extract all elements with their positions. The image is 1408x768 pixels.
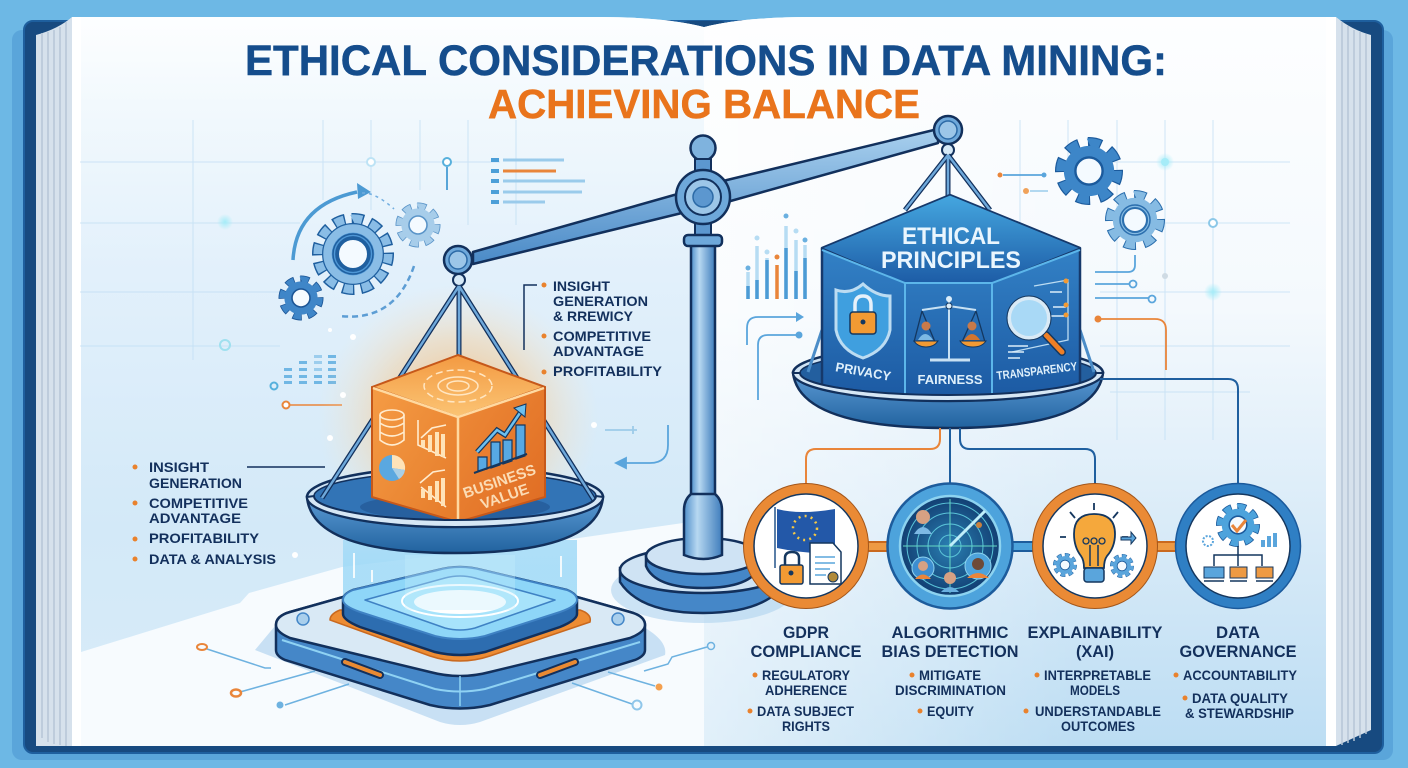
connectors between circles	[865, 541, 1179, 552]
left text list: ADVANTAGE	[149, 510, 241, 526]
text: algorithmic bias detection: MITIGATE	[919, 667, 981, 683]
circle: data governance	[1176, 484, 1300, 608]
middle text list: ADVANTAGE	[553, 343, 644, 359]
left text list: DATA & ANALYSIS	[149, 551, 276, 567]
title: ETHICAL CONSIDERATIONS IN DATA MINING:	[245, 37, 1167, 85]
icon: gear on cube top	[424, 370, 492, 402]
text: algorithmic bias detection: BIAS DETECTION	[882, 642, 1018, 661]
left text list: GENERATION	[149, 475, 242, 491]
icon: people on radar	[912, 510, 991, 592]
text: data governance: ACCOUNTABILITY	[1183, 667, 1298, 683]
text: algorithmic bias detection	[882, 623, 1018, 719]
middle text list: PROFITABILITY	[553, 363, 663, 379]
title	[245, 37, 1167, 127]
post of scale	[684, 240, 722, 559]
sparkle dots	[292, 328, 597, 558]
text: data governance: GOVERNANCE	[1180, 642, 1296, 661]
icon: pie chart	[379, 455, 405, 481]
text: explainability: (XAI)	[1076, 642, 1114, 661]
cube label	[461, 461, 543, 517]
text: explainability: INTERPRETABLE	[1044, 667, 1151, 683]
left text list: PROFITABILITY	[149, 530, 260, 546]
orange connector left	[282, 402, 342, 408]
title: ACHIEVING BALANCE	[488, 81, 920, 127]
platform base	[255, 595, 665, 725]
text: explainability: UNDERSTANDABLE	[1035, 703, 1161, 719]
text: algorithmic bias detection: EQUITY	[927, 703, 975, 719]
scale beam	[444, 116, 962, 286]
left text list: COMPETITIVE	[149, 495, 248, 511]
icon: document	[810, 543, 841, 584]
label: fairness: FAIRNESS	[918, 372, 983, 387]
right pan strings	[905, 155, 990, 210]
text: GDPR compliance: RIGHTS	[782, 718, 830, 734]
middle text list: & RREWICY	[553, 308, 634, 324]
right side connectors	[998, 172, 1166, 370]
circle: explainability	[1032, 484, 1158, 608]
platform top plate with hologram	[343, 540, 577, 655]
text: data governance: & STEWARDSHIP	[1185, 705, 1294, 721]
circuit traces	[197, 642, 714, 710]
middle text list: GENERATION	[553, 293, 648, 309]
arrows: into ethical principles	[747, 312, 804, 400]
text: GDPR compliance: DATA SUBJECT	[757, 703, 854, 719]
text: data governance: DATA	[1216, 623, 1260, 642]
right pan front rim	[793, 373, 1103, 401]
icon: cube mini chart upper	[418, 420, 446, 458]
text: explainability: OUTCOMES	[1061, 718, 1135, 734]
label: privacy: PRIVACY	[834, 359, 892, 384]
arrow: return to left pan	[605, 425, 668, 468]
middle text list: INSIGHT	[553, 278, 610, 294]
middle text list	[524, 278, 663, 379]
left text list	[132, 459, 325, 567]
right pan back	[793, 330, 1103, 428]
text: GDPR compliance	[748, 623, 862, 734]
icon: fairness scales	[914, 296, 986, 360]
icon: EU flag	[775, 507, 835, 568]
text: GDPR compliance: COMPLIANCE	[750, 642, 862, 661]
floor highlight	[81, 520, 704, 746]
icon: database on cube	[380, 410, 404, 445]
left pan strings	[322, 286, 594, 500]
chart: central bars	[746, 214, 808, 299]
heading inside box: ETHICAL	[902, 223, 1000, 250]
text: explainability	[1024, 623, 1163, 734]
text: explainability: EXPLAINABILITY	[1028, 623, 1163, 642]
text: algorithmic bias detection: DISCRIMINATION	[895, 682, 1006, 698]
icon: growth chart	[474, 404, 527, 473]
ethical principles box	[822, 195, 1080, 397]
left pan front rim	[307, 496, 603, 527]
icon: governance gear	[1220, 507, 1256, 543]
business value cube	[372, 355, 545, 522]
base of scale	[611, 538, 795, 623]
connectors from pan to circles	[806, 379, 1238, 484]
left pan	[307, 467, 603, 553]
icon: cube mini chart lower	[420, 470, 446, 507]
cube label: VALUE	[478, 481, 531, 513]
left text list: INSIGHT	[149, 459, 209, 475]
right page	[704, 17, 1336, 746]
text: GDPR compliance: ADHERENCE	[765, 682, 847, 698]
icon: org chart	[1203, 533, 1275, 581]
ethical principles box: PRINCIPLES	[881, 247, 1021, 274]
icon: magnifier over document	[1007, 278, 1068, 358]
icon: light bulb	[1060, 503, 1136, 582]
circle: GDPR compliance	[744, 484, 868, 608]
mini bar chart left	[284, 355, 336, 384]
left page	[72, 17, 704, 746]
icon: small gears	[1055, 555, 1075, 575]
icon: shield	[836, 284, 890, 358]
background glow nodes	[217, 153, 1222, 390]
glow behind cube	[318, 285, 598, 555]
text: algorithmic bias detection: ALGORITHMIC	[892, 623, 1008, 642]
icon: padlock	[780, 552, 803, 584]
icon: left gears cluster	[283, 183, 436, 317]
text: explainability: MODELS	[1070, 682, 1120, 698]
icon: pin and data lines top left	[367, 158, 585, 204]
cube label: BUSINESS	[461, 461, 538, 502]
book spine notch	[685, 21, 725, 27]
middle text list: COMPETITIVE	[553, 328, 651, 344]
icon: right gears	[1061, 143, 1160, 245]
text: GDPR compliance: REGULATORY	[762, 667, 851, 683]
circle: algorithmic bias detection	[888, 484, 1012, 608]
text: data governance: DATA QUALITY	[1192, 690, 1289, 706]
icon: check mark	[1232, 520, 1246, 531]
background grid	[80, 120, 1290, 440]
text: data governance	[1174, 623, 1298, 721]
label: transparency: TRANSPARENCY	[996, 359, 1078, 383]
text: GDPR compliance: GDPR	[783, 623, 829, 642]
